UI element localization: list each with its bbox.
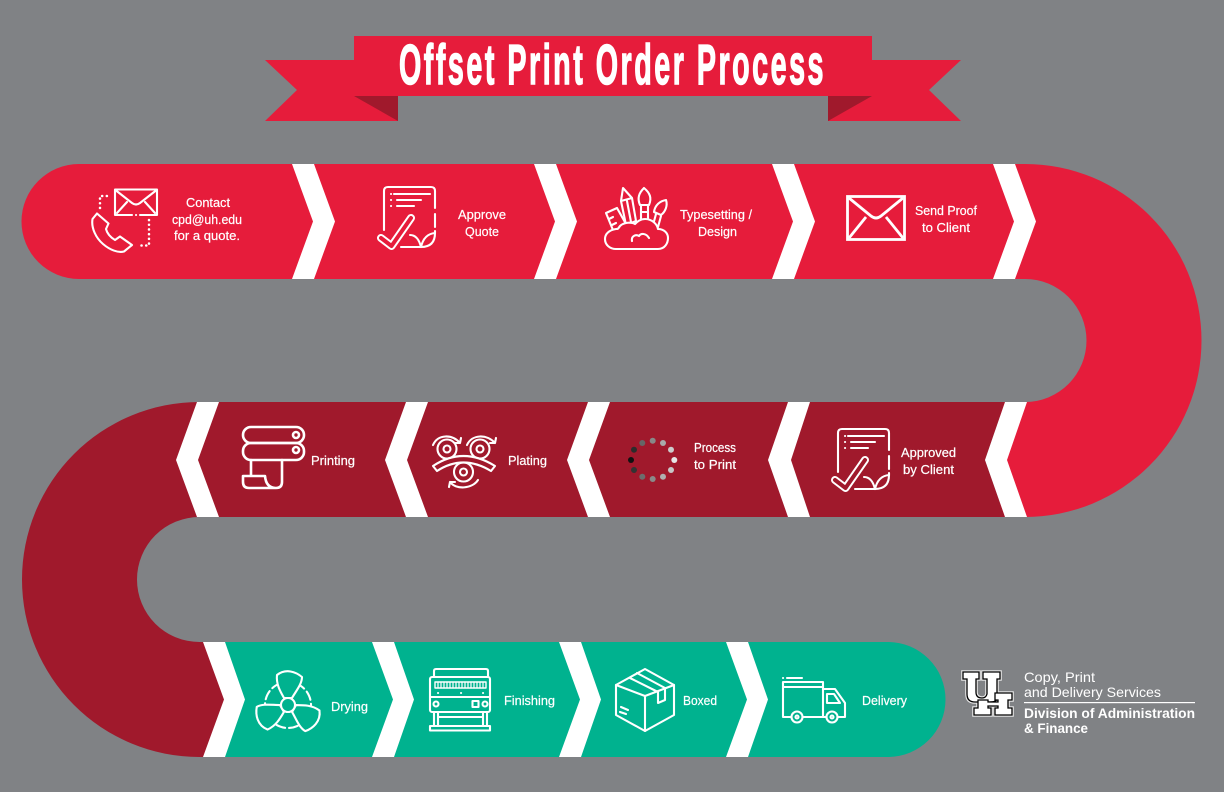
label: delivery: Delivery — [862, 693, 907, 708]
label: typesetting design — [680, 207, 752, 239]
icon: printing roll — [243, 427, 304, 488]
icon: cardboard box — [616, 669, 674, 731]
icon: pens and cloud — [605, 188, 668, 249]
icon: loading spinner — [628, 438, 677, 482]
department text: and Delivery Services — [1024, 684, 1161, 700]
icon: document with check — [381, 187, 435, 247]
label: send proof — [915, 203, 977, 235]
label: approve quote — [458, 207, 506, 239]
step: process to print — [628, 438, 736, 482]
icon: envelope and phone — [92, 190, 157, 252]
department text — [1024, 669, 1195, 736]
label: send proof: Send Proof — [915, 203, 977, 218]
label: approve quote: Quote — [465, 224, 499, 239]
label: approved by client: by Client — [903, 462, 954, 477]
icon: cutting machine — [430, 669, 490, 730]
label: send proof: to Client — [922, 220, 970, 235]
label: plating: Plating — [508, 453, 547, 468]
step: contact — [92, 190, 242, 252]
chevrons between steps — [176, 164, 1036, 757]
label: drying: Drying — [331, 699, 368, 714]
step: printing — [243, 427, 355, 488]
step: approved by client — [835, 429, 956, 489]
label: approved by client — [901, 445, 956, 477]
icon: envelope — [848, 196, 904, 240]
step: plating — [433, 436, 547, 487]
label: contact: cpd@uh.edu — [172, 212, 242, 227]
logo: University of Houston UH — [963, 672, 1012, 715]
step: typesetting design — [605, 188, 752, 249]
title banner: Offset Print Order Process — [399, 33, 826, 97]
step: approve quote — [381, 187, 506, 247]
label: process to print: Process — [694, 440, 736, 455]
label: contact: for a quote. — [174, 228, 240, 243]
step: drying — [252, 671, 368, 734]
title banner — [265, 33, 961, 121]
label: contact: Contact — [186, 195, 230, 210]
label: typesetting design: Design — [698, 224, 737, 239]
label: approve quote: Approve — [458, 207, 506, 222]
step: finishing — [430, 669, 555, 730]
icon: delivery truck — [783, 678, 845, 722]
icon: plate rollers — [433, 436, 496, 487]
label: boxed: Boxed — [683, 693, 717, 708]
step: delivery — [783, 678, 907, 722]
department text: Copy, Print — [1024, 669, 1095, 685]
department text: Division of Administration — [1024, 705, 1195, 721]
label: approved by client: Approved — [901, 445, 956, 460]
icon: fan — [252, 671, 323, 734]
label: process to print — [694, 440, 736, 472]
process path ribbon — [21, 164, 1201, 757]
label: process to print: to Print — [694, 457, 736, 472]
step: boxed — [616, 669, 717, 731]
label: typesetting design: Typesetting / — [680, 207, 752, 222]
department text: & Finance — [1024, 720, 1088, 736]
icon: document with check — [835, 429, 889, 489]
label: printing: Printing — [311, 453, 355, 468]
label: contact — [172, 195, 242, 243]
label: finishing: Finishing — [504, 693, 555, 708]
step: send proof — [848, 196, 977, 240]
